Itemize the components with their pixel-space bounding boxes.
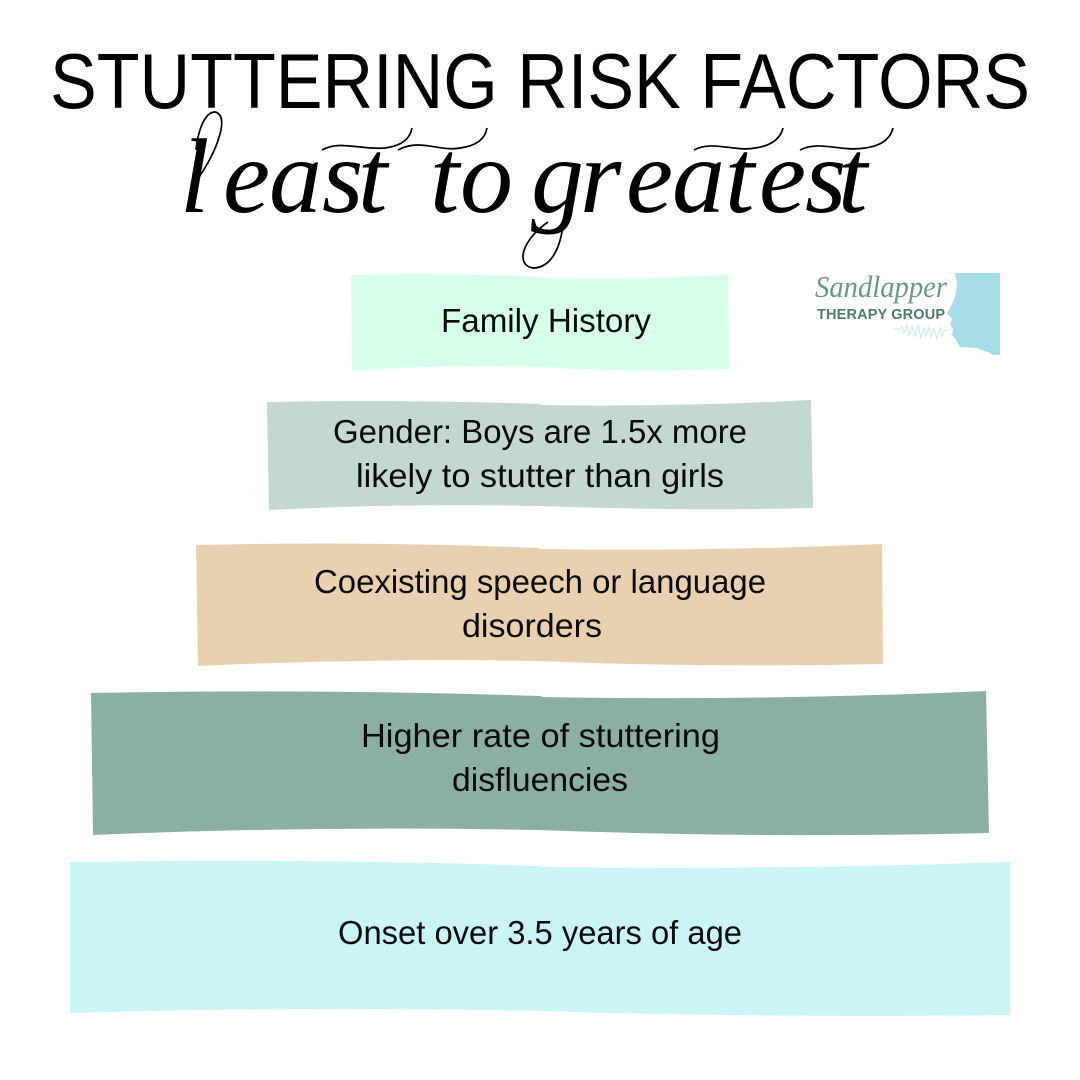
- panel: higher rate of disfluencies: [91, 691, 989, 835]
- logo script name: Sandlapper: [815, 269, 948, 304]
- label: disfluencies: [452, 761, 628, 798]
- icon: face profile: [947, 273, 1000, 355]
- label: disorders: [462, 607, 602, 644]
- label: [314, 563, 766, 644]
- script subtitle: least to greatest: [180, 118, 870, 235]
- panel: family history: [351, 274, 729, 371]
- icon: sound wave: [893, 324, 949, 339]
- panel: gender: [267, 400, 813, 510]
- label: Family History: [441, 302, 651, 339]
- logo: Sandlapper Therapy Group: [815, 269, 1000, 355]
- label: Higher rate of stuttering: [361, 717, 720, 754]
- label: Coexisting speech or language: [314, 563, 766, 600]
- label: [333, 413, 747, 494]
- label: [361, 717, 720, 798]
- label: likely to stutter than girls: [356, 457, 724, 494]
- label: Onset over 3.5 years of age: [338, 914, 742, 951]
- panel: coexisting disorders: [196, 544, 883, 666]
- panel: onset age: [70, 861, 1010, 1016]
- logo subtitle: THERAPY GROUP: [817, 307, 945, 323]
- label: Gender: Boys are 1.5x more: [333, 413, 747, 450]
